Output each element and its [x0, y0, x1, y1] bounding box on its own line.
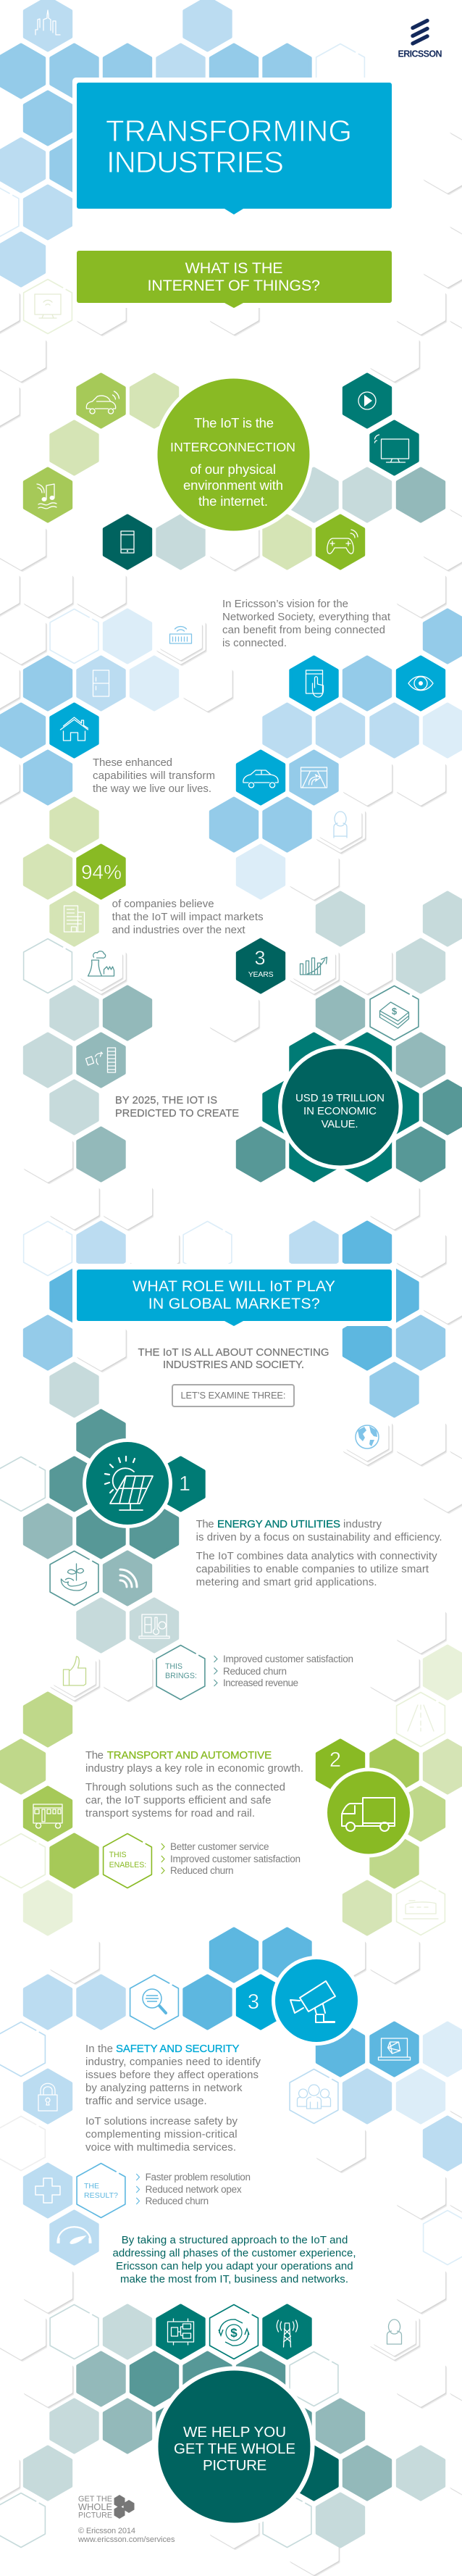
heading: role of IoT in global markets: WHAT ROLE WILL IoT PLAY: [133, 1277, 335, 1295]
white frame behind markets heading: [72, 1264, 396, 1326]
icon: person: [371, 2306, 419, 2360]
icon: plant in hand: [50, 1551, 98, 1606]
icon: tablet touch: [290, 656, 337, 710]
list: energy benefits: Increased revenue: [223, 1677, 298, 1688]
icon: connected television: [371, 422, 418, 474]
icon: connected home: [51, 704, 98, 756]
text block: safety and security: IoT solutions increase safety by: [85, 2115, 238, 2127]
text block: enhanced capabilities: the way we live our lives.: [93, 783, 211, 795]
text block: energy and utilities: capabilities to enable companies to utilize smart: [196, 1563, 429, 1575]
hexagon background: statistics tiles: [25, 799, 462, 1181]
text block: safety and security: [85, 2043, 261, 2154]
logo: Ericsson: ERICSSON: [398, 49, 442, 59]
circle: USD 19 trillion value: IN ECONOMIC: [303, 1105, 377, 1117]
text block: energy and utilities: ENERGY AND UTILITIES: [217, 1518, 340, 1530]
circle: we help you get the whole picture: [154, 2367, 314, 2527]
icon: pale road: [397, 1693, 445, 1746]
logo: get the whole picture: PICTURE: [78, 2512, 112, 2520]
statistic: 3 years: 3: [254, 947, 266, 969]
text block: predicted 2025: [115, 1095, 239, 1120]
text block: transport and automotive: TRANSPORT AND AUTOMOTIVE: [107, 1749, 272, 1762]
circle: we help you get the whole picture: WE HELP YOU: [183, 2424, 286, 2440]
circle: we help you get the whole picture: GET THE WHOLE: [174, 2440, 295, 2457]
circle: USD 19 trillion value: USD 19 TRILLION: [295, 1092, 385, 1104]
text block: enhanced capabilities: capabilities will transform: [93, 770, 215, 782]
text block: connecting industries and society: THE IoT IS ALL ABOUT CONNECTING: [138, 1346, 329, 1359]
hexagon background: interconnection tiles: [51, 374, 444, 568]
text block: networked society: is connected.: [222, 637, 287, 649]
list: energy benefits: Improved customer satisfaction: [223, 1654, 353, 1664]
icon: speed gauge: [51, 2212, 98, 2264]
text block: closing statement: Ericsson can help you adapt your operations and: [116, 2260, 353, 2272]
circle: IoT interconnection definition: the internet.: [198, 493, 268, 509]
footer: copyright and url: www.ericsson.com/services: [77, 2535, 175, 2544]
list: transport benefits: [161, 1841, 301, 1876]
icon: factory: [77, 939, 126, 994]
text block: safety and security: traffic and service usage.: [85, 2095, 207, 2107]
statistic: 3 years: [238, 939, 284, 993]
text block: safety and security: SAFETY AND SECURITY: [116, 2043, 239, 2055]
circle: we help you get the whole picture: PICTURE: [203, 2457, 266, 2474]
statistic: 94 percent: 94%: [81, 861, 122, 883]
heading: role of IoT in global markets: IN GLOBAL MARKETS?: [148, 1295, 320, 1312]
list: transport benefits: Reduced churn: [170, 1865, 233, 1876]
logo: get the whole picture: GET THE: [78, 2495, 112, 2504]
text block: companies believe: [112, 898, 264, 936]
icon: process diagram: [157, 2306, 204, 2358]
text block: transport and automotive: car, the IoT supports efficient and safe: [85, 1794, 271, 1806]
callout: this brings: THIS: [165, 1662, 182, 1671]
icon: coins exchange: [77, 1033, 125, 1087]
callout: the result: RESULT?: [84, 2191, 118, 2200]
icon: pale train: [397, 1881, 445, 1935]
icon: magnifier search: [130, 1975, 178, 2029]
icon: thermostat panel: [131, 1598, 177, 1652]
title panel: TRANSFORMING: [106, 114, 352, 148]
text block: energy and utilities: metering and smart grid applications.: [196, 1576, 377, 1588]
statistic: 94 percent: [77, 845, 125, 899]
icon: padlock: [25, 2069, 71, 2123]
text block: energy and utilities: is driven by a focus on sustainability and efficiency.: [196, 1531, 442, 1543]
icon: eye: [398, 656, 444, 710]
icon: number 1 with solar panel: 1: [179, 1472, 190, 1496]
circle: IoT interconnection definition: of our physical: [190, 462, 276, 477]
list: energy benefits: [214, 1654, 353, 1688]
text block: closing statement: addressing all phases of the customer experience,: [113, 2247, 356, 2259]
text block: connecting industries and society: INDUSTRIES AND SOCIETY.: [163, 1359, 304, 1371]
white frame behind title: [72, 78, 396, 308]
text block: safety and security: issues before they affect operations: [85, 2069, 259, 2081]
footer: copyright and url: [77, 2527, 175, 2544]
callout: the result: [77, 2164, 125, 2217]
text block: closing statement: make the most from IT, business and networks.: [120, 2273, 348, 2285]
icon: dollar cycle: [210, 2304, 258, 2359]
callout: this brings: [156, 1645, 205, 1700]
circle: USD 19 trillion value: VALUE.: [322, 1118, 358, 1130]
button: let's examine three: [172, 1385, 294, 1406]
circle: IoT interconnection definition: INTERCONNECTION: [170, 440, 295, 454]
list: safety benefits: Reduced network opex: [146, 2184, 242, 2195]
text block: energy and utilities: The: [196, 1518, 214, 1530]
callout: this enables: [104, 1833, 151, 1888]
callout: this enables: THIS: [109, 1851, 127, 1859]
text block: transport and automotive: The: [85, 1749, 104, 1762]
circle: USD 19 trillion value: [278, 1045, 403, 1170]
callout: this brings: BRINGS:: [165, 1672, 197, 1680]
icon: music notes: [25, 468, 71, 522]
text block: energy and utilities: industry: [343, 1518, 382, 1530]
icon: medical cross: [25, 2164, 71, 2217]
text block: closing statement: [113, 2234, 356, 2285]
hexagon background: safety tiles: [25, 1929, 462, 2169]
heading: what is the internet of things: INTERNET OF THINGS?: [148, 277, 320, 294]
icon: number 2 with truck: [317, 1741, 413, 1858]
icon: growth chart: [290, 939, 339, 994]
hexagon background: energy tiles: [25, 1458, 462, 1698]
icon: number 1 with solar panel: [83, 1438, 204, 1528]
icon: money stack: $: [392, 1006, 398, 1017]
hexagon background: transport tiles: [0, 1693, 462, 1935]
text block: enhanced capabilities: These enhanced: [93, 756, 172, 769]
text block: enhanced capabilities: [93, 756, 215, 795]
icon: smartphone: [104, 516, 151, 568]
icon: number 3 with security camera: [238, 1956, 361, 2046]
icon: number 3 with security camera: 3: [248, 1991, 259, 2014]
heading: what is the internet of things: [77, 251, 392, 308]
text block: closing statement: By taking a structured approach to the IoT and: [122, 2234, 348, 2246]
callout: the result: THE: [84, 2182, 99, 2191]
logo: Ericsson: [398, 20, 442, 59]
icon: pale monitor: [24, 280, 72, 333]
text block: companies believe: that the IoT will impact markets: [112, 911, 264, 923]
icon: laptop with cube: [371, 2023, 418, 2075]
icon: group of people: [290, 2069, 338, 2123]
hexagon background: blue header tiles: [0, 0, 311, 285]
icon: globe: [344, 1410, 392, 1465]
icon: office building: [51, 893, 98, 945]
title panel: [77, 83, 392, 214]
circle: IoT interconnection definition: The IoT is the: [194, 415, 274, 430]
icon: wireless signal: [104, 1552, 151, 1604]
logo: get the whole picture: WHOLE: [78, 2501, 112, 2512]
text block: safety and security: complementing mission-critical: [85, 2128, 238, 2141]
text block: companies believe: and industries over the next: [112, 924, 245, 936]
hexagon background: global markets tiles: [25, 1222, 444, 1464]
icon: dollar cycle: $: [230, 2326, 238, 2340]
list: safety benefits: Faster problem resolution: [146, 2172, 251, 2183]
text block: connecting industries and society: [138, 1346, 329, 1371]
icon: signal tower: [264, 2306, 311, 2358]
text block: transport and automotive: Through solutions such as the connected: [85, 1781, 285, 1793]
icon: game controller: [317, 516, 364, 568]
icon: video play: [344, 374, 390, 428]
list: safety benefits: [136, 2172, 251, 2206]
circle: IoT interconnection definition: [154, 375, 313, 535]
text block: predicted 2025: BY 2025, THE IOT IS: [115, 1095, 217, 1106]
statistic: 3 years: YEARS: [248, 970, 274, 979]
text block: safety and security: industry, companies need to identify: [85, 2056, 261, 2068]
icon: fridge: [77, 656, 125, 710]
text block: energy and utilities: [196, 1518, 442, 1588]
icon: router: [157, 610, 206, 664]
list: energy benefits: Reduced churn: [223, 1666, 287, 1677]
hexagon background: networked society tiles: [0, 610, 462, 899]
icon: thumbs up: [51, 1646, 99, 1701]
title panel: INDUSTRIES: [106, 145, 284, 179]
icon: bus: [25, 1787, 71, 1841]
hexagon background: closing tiles: [25, 2306, 444, 2546]
icon: car: [238, 751, 284, 804]
list: transport benefits: Improved customer satisfaction: [170, 1854, 301, 1864]
heading: role of IoT in global markets: [77, 1270, 392, 1326]
icon: number 2 with truck: 2: [329, 1748, 341, 1772]
icon: connected car: [77, 374, 125, 428]
icon: navigation road: [290, 751, 337, 804]
list: transport benefits: Better customer service: [170, 1841, 269, 1852]
text block: networked society: In Ericsson’s vision for the: [222, 598, 348, 610]
heading: what is the internet of things: WHAT IS THE: [185, 259, 283, 277]
logo: get the whole picture: [78, 2495, 135, 2520]
text block: energy and utilities: The IoT combines data analytics with connectivity: [196, 1550, 437, 1562]
callout: this enables: ENABLES:: [109, 1861, 146, 1870]
text block: companies believe: of companies believe: [112, 898, 214, 910]
text block: transport and automotive: transport systems for road and rail.: [85, 1807, 255, 1820]
text block: safety and security: voice with multimedia services.: [85, 2141, 236, 2154]
text block: networked society: can benefit from being connected: [222, 624, 385, 636]
list: safety benefits: Reduced churn: [146, 2196, 209, 2206]
text block: networked society: [222, 598, 391, 649]
text block: networked society: Networked Society, everything that: [222, 611, 391, 623]
text block: safety and security: by analyzing patterns in network: [85, 2082, 243, 2094]
circle: IoT interconnection definition: environment with: [183, 478, 283, 493]
button: let's examine three: LET’S EXAMINE THREE:: [181, 1390, 285, 1401]
text block: transport and automotive: [85, 1749, 303, 1820]
text block: transport and automotive: industry plays a key role in economic growth.: [85, 1762, 303, 1775]
text block: safety and security: In the: [85, 2043, 113, 2055]
text block: predicted 2025: PREDICTED TO CREATE: [115, 1108, 239, 1120]
footer: copyright and url: © Ericsson 2014: [78, 2527, 135, 2535]
icon: person: [317, 799, 365, 853]
icon: city skyline: [25, 0, 71, 51]
icon: money stack: [370, 985, 419, 1041]
